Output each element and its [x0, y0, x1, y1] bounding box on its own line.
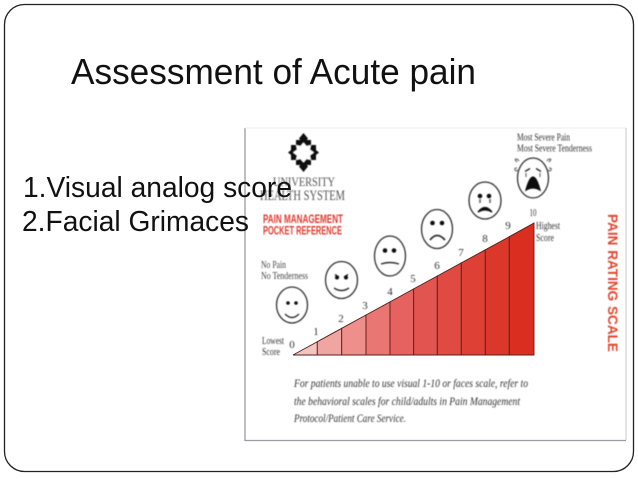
scale numbers: 0	[289, 339, 295, 351]
scale numbers: 7	[458, 247, 464, 259]
scale numbers: 5	[410, 273, 416, 285]
instruction note	[293, 376, 528, 425]
most severe label	[517, 132, 592, 154]
instruction note: the behavioral scales for child/adults in Pain Management	[294, 394, 521, 408]
scale numbers: 4	[387, 286, 393, 298]
pocket reference heading	[263, 212, 343, 238]
pain scale image panel	[245, 128, 626, 440]
scale numbers: 10	[530, 207, 537, 219]
highest score label	[536, 221, 560, 244]
instruction note: Protocol/Patient Care Service.	[293, 411, 406, 425]
no pain label: No Tenderness	[261, 271, 308, 282]
pocket reference heading: POCKET REFERENCE	[263, 224, 342, 238]
title: Assessment of Acute pain	[71, 51, 476, 92]
highest score label: Score	[536, 233, 554, 244]
lowest score label: Score	[262, 347, 280, 358]
icon: face 0 smiling	[276, 287, 308, 323]
scale numbers: 3	[362, 300, 368, 312]
logo wordmark: UNIVERSITY	[273, 174, 335, 189]
icon: face 2 flat mouth	[374, 236, 406, 276]
lowest score label: Lowest	[262, 336, 284, 347]
rating wedge chart	[293, 223, 534, 355]
logo wordmark	[260, 174, 345, 204]
highest score label: Highest	[536, 221, 560, 232]
icon: face 3 frown	[422, 210, 452, 248]
scale numbers: 2	[338, 313, 344, 325]
scale numbers: 9	[505, 220, 511, 232]
pocket reference heading: PAIN MANAGEMENT	[263, 212, 343, 226]
instruction note: For patients unable to use visual 1-10 or faces scale, refer to	[293, 376, 528, 390]
logo wordmark: HEALTH SYSTEM	[260, 188, 345, 204]
scale numbers: 8	[482, 233, 488, 245]
scale numbers	[289, 207, 537, 351]
scale numbers: 1	[313, 326, 319, 338]
icon: face 4 crying	[469, 182, 501, 219]
pain rating scale vertical label: PAIN RATING SCALE	[605, 214, 620, 352]
lowest score label	[262, 336, 284, 358]
bullet list: 2.Facial Grimaces	[22, 206, 249, 238]
bullet list: 1.Visual analog score	[23, 172, 292, 204]
icon: face 1 slight smile	[326, 262, 358, 298]
no pain label: No Pain	[261, 260, 287, 271]
no pain label	[261, 260, 308, 282]
scale numbers: 6	[434, 260, 440, 272]
most severe label: Most Severe Pain	[517, 132, 571, 144]
bullet list	[22, 172, 292, 238]
icon: face 5 severe crying	[515, 158, 551, 198]
icon: university logo	[288, 133, 319, 172]
most severe label: Most Severe Tenderness	[517, 144, 592, 154]
